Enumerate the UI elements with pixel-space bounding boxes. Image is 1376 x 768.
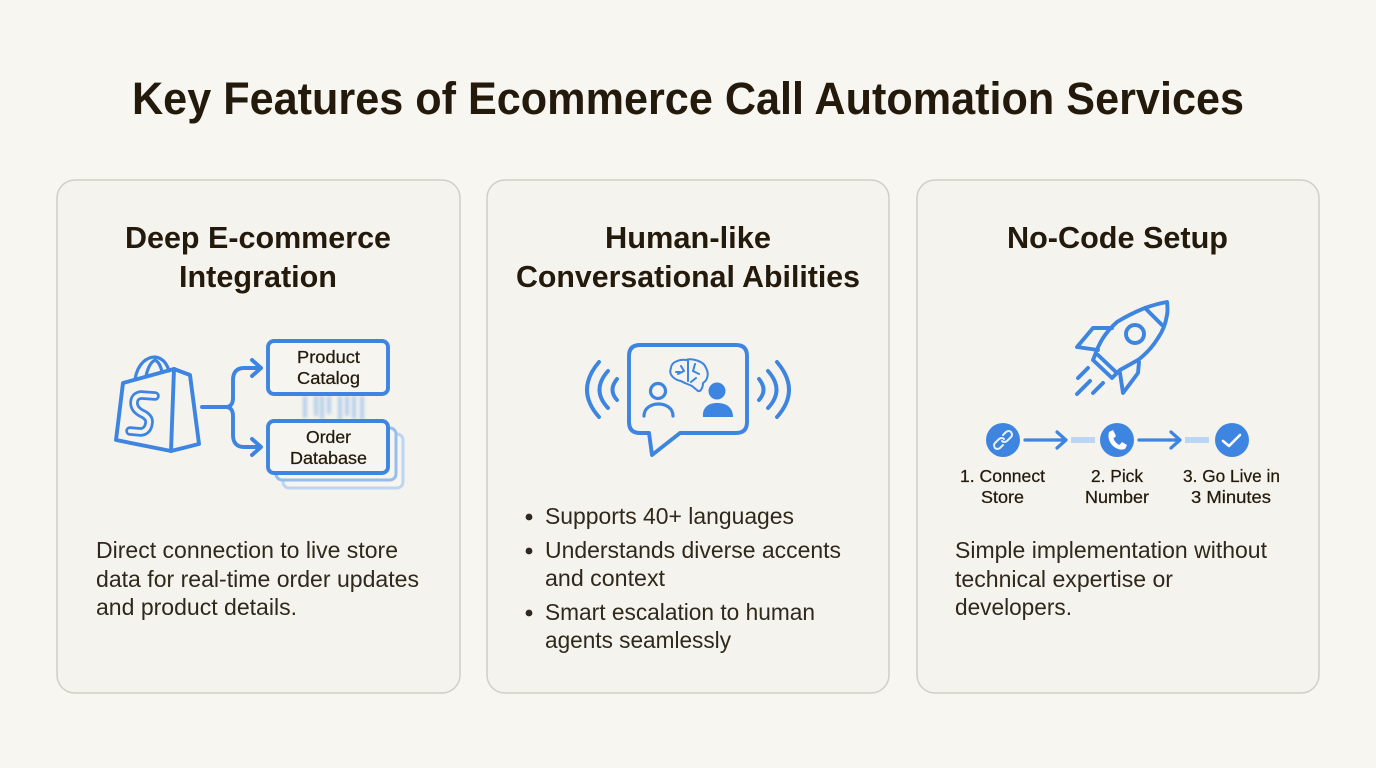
text: integration description: Direct connection to live store [96,537,398,563]
icon: rocket [1077,302,1168,394]
sound waves left [587,362,617,417]
panel: deep e-commerce integration [57,180,460,693]
step 2 pick number: Number [1085,487,1149,507]
step 3 go live: 3. Go Live in [1183,466,1280,486]
box: product catalog [268,341,388,394]
arrows: store to data sources [202,360,261,455]
arrow 1 [1025,432,1095,448]
heading: deep e-commerce integration: Integration [179,259,337,294]
panel: human-like conversational abilities [487,180,889,693]
text: setup description: technical expertise or [955,566,1173,592]
heading: human-like conversational abilities [516,220,860,294]
title: Key Features of Ecommerce Call Automation Services [132,73,1244,124]
person outline [644,384,673,416]
text: integration description: data for real-time order updates [96,566,419,592]
step 1 connect store [960,423,1045,507]
brain [670,359,708,391]
list: conversational abilities: Smart escalation to human [545,599,815,625]
text: integration description [96,537,419,620]
data stream between boxes [305,396,362,420]
person filled [703,382,733,417]
arrow 2 [1139,432,1209,448]
step 2 pick number: 2. Pick [1091,466,1143,486]
text: integration description: and product details. [96,594,297,620]
box: product catalog: Product [297,347,360,367]
icon: speech bubble with brain and people [587,345,789,455]
box: order database stack: Order [306,427,351,447]
step flow [960,423,1280,507]
step 3 go live [1183,423,1280,507]
sound waves right [759,362,789,417]
heading: no-code setup: No-Code Setup [1007,220,1228,255]
step 1 connect store: 1. Connect [960,466,1045,486]
list: conversational abilities: Understands diverse accents [545,537,841,563]
box: order database stack: Database [290,448,367,468]
heading: deep e-commerce integration: Deep E-commerce [125,220,391,255]
box: order database stack [268,421,403,488]
text: setup description: Simple implementation without [955,537,1268,563]
step 2 pick number [1085,423,1149,507]
heading: deep e-commerce integration [125,220,391,294]
icon: shopping bag [116,357,199,451]
panel: no-code setup [917,180,1319,693]
step 1 connect store: Store [981,487,1024,507]
step 3 go live: 3 Minutes [1191,487,1271,507]
list: conversational abilities: Supports 40+ languages [545,503,794,529]
heading: human-like conversational abilities: Conversational Abilities [516,259,860,294]
text: setup description [955,537,1268,620]
heading: human-like conversational abilities: Human-like [605,220,771,255]
list: conversational abilities: agents seamlessly [545,627,731,653]
list: conversational abilities [526,503,841,653]
text: setup description: developers. [955,594,1072,620]
box: product catalog: Catalog [297,368,360,388]
list: conversational abilities: and context [545,565,666,591]
